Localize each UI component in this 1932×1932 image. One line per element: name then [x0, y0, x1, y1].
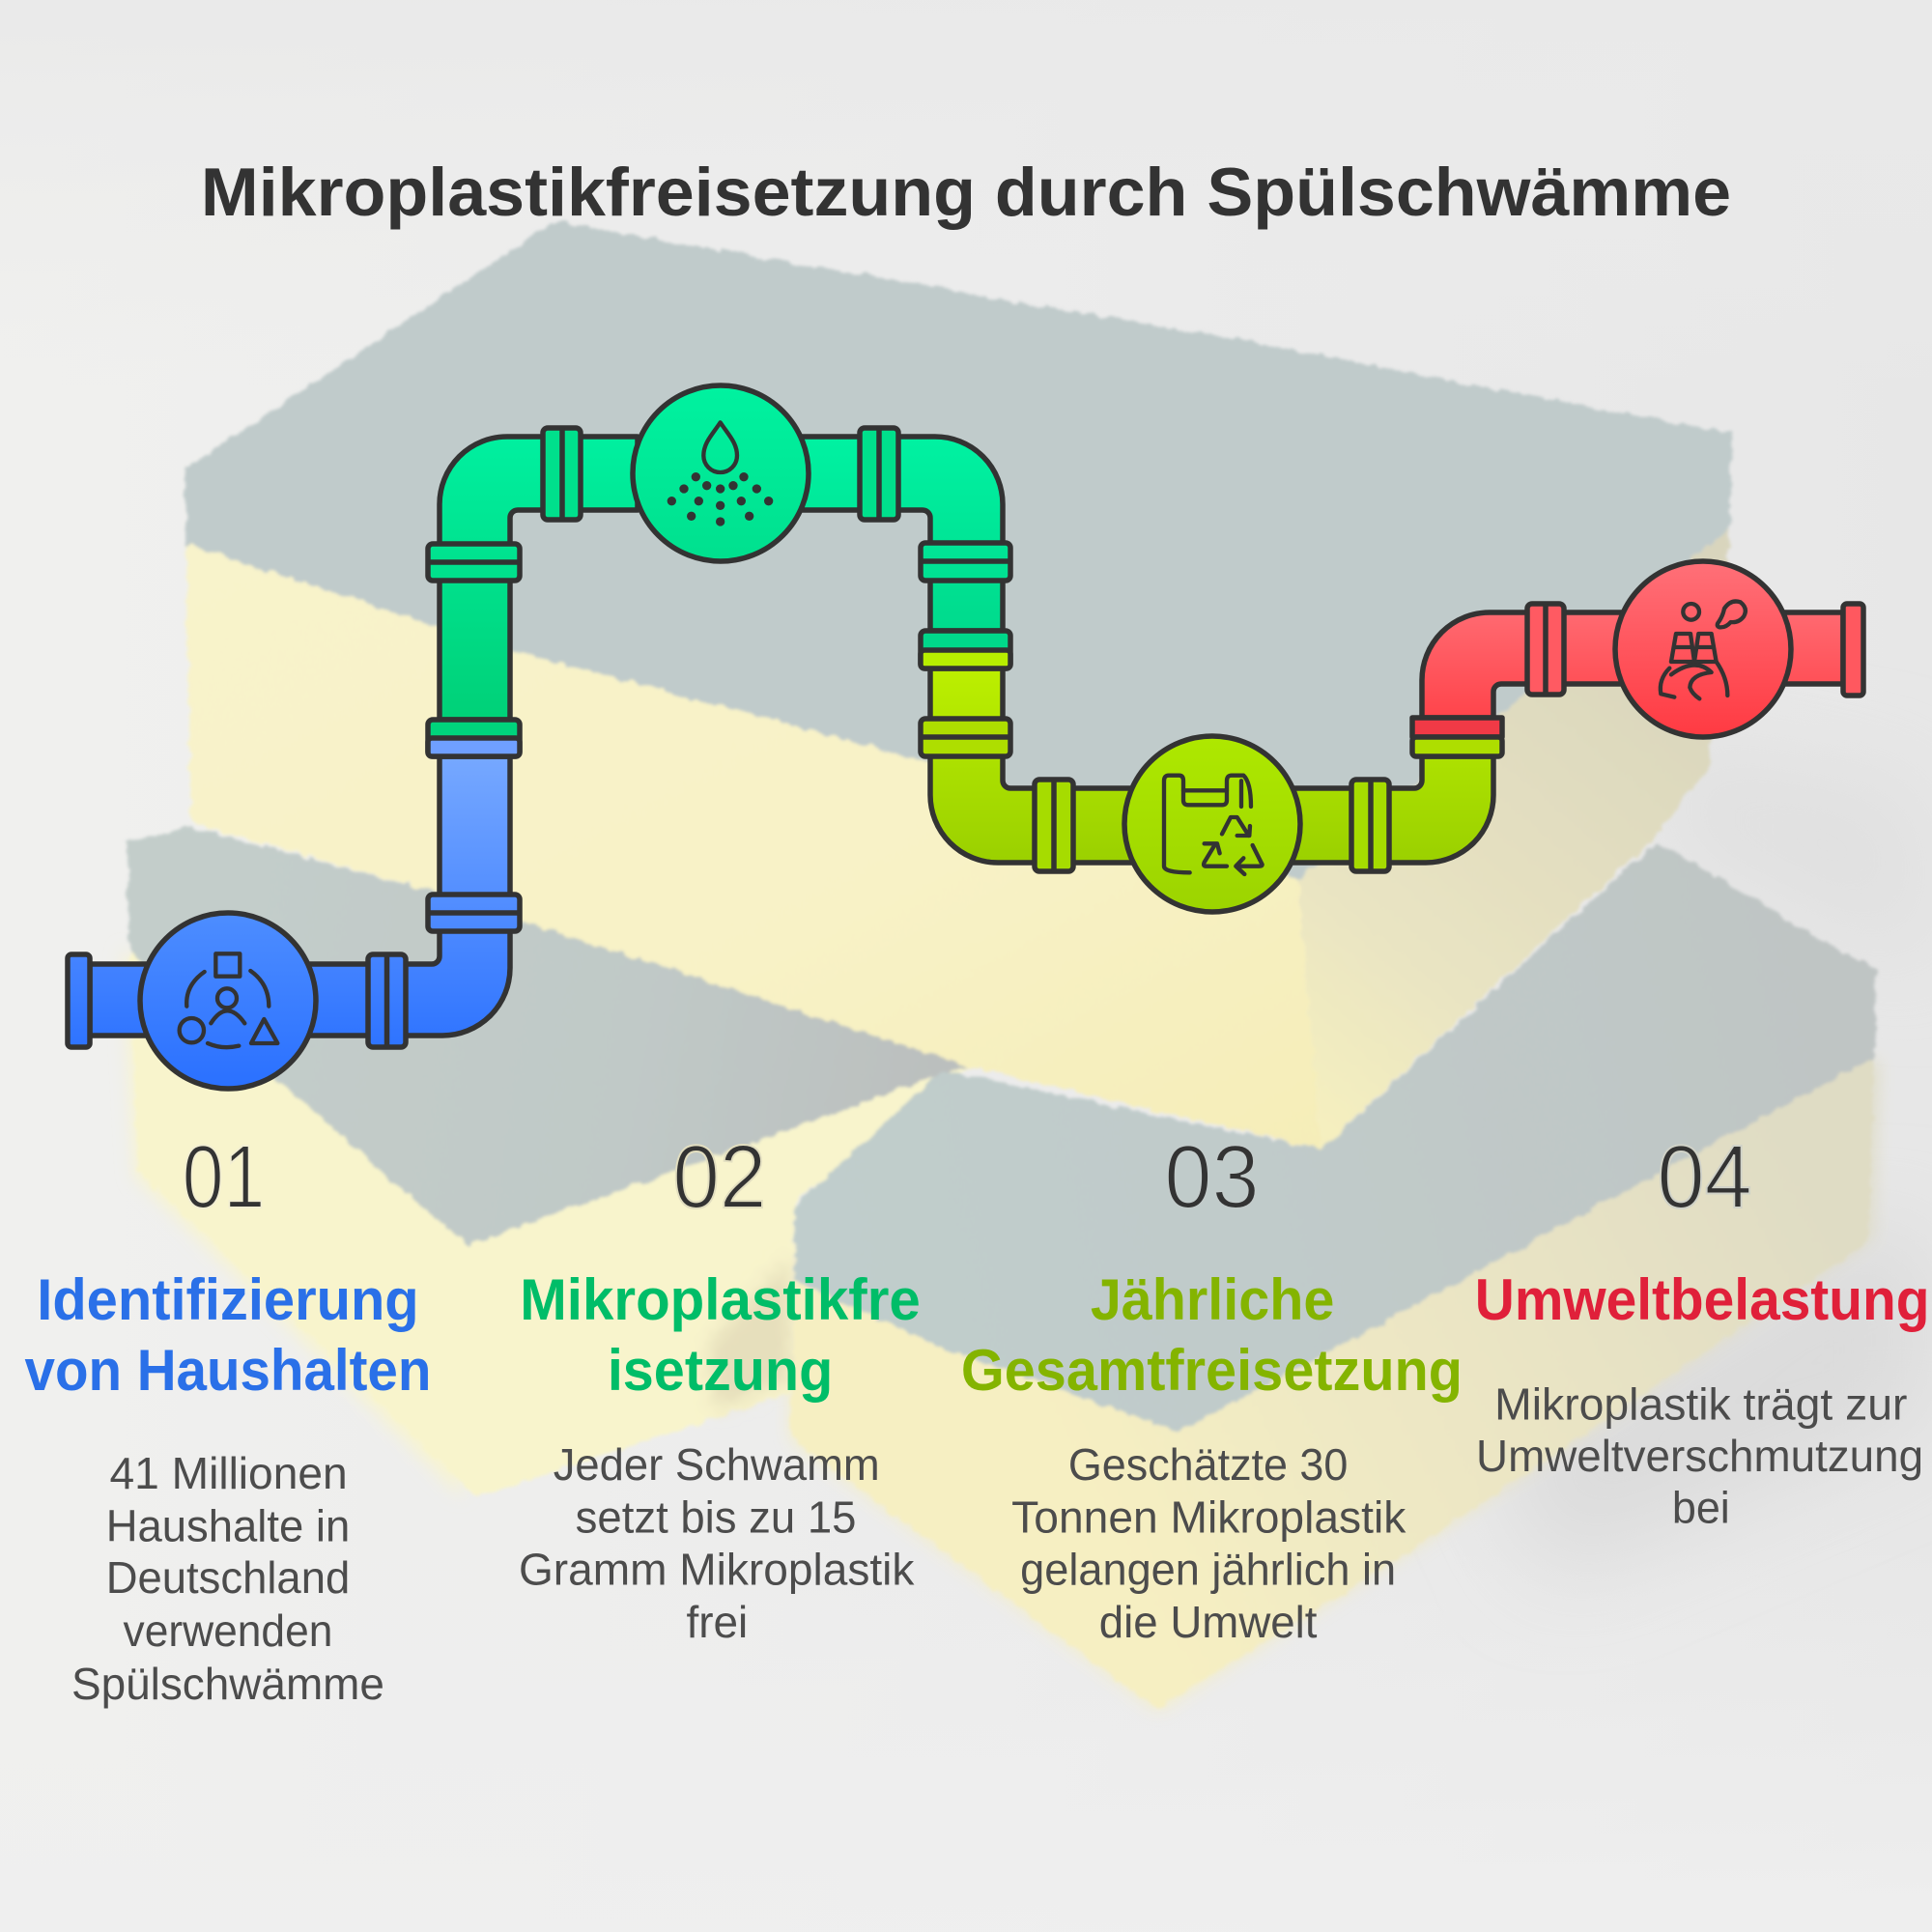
step 1 heading — [25, 1267, 431, 1403]
step 1 number: 01 — [183, 1126, 265, 1227]
step 1 description — [71, 1448, 384, 1709]
step 2 description: Gramm Mikroplastik — [519, 1544, 915, 1594]
icon: people and shapes — [180, 953, 277, 1047]
step 4 description: Umweltverschmutzung — [1476, 1431, 1923, 1481]
step 3 heading: Gesamtfreisetzung — [961, 1338, 1463, 1403]
step 4 description — [1476, 1378, 1923, 1533]
step 2 heading: Mikroplastikfre — [520, 1267, 921, 1332]
step 1 heading: Identifizierung — [37, 1267, 419, 1332]
left lower sponge — [127, 827, 972, 1497]
pipe segment: blue — [68, 756, 520, 1047]
step 2 heading — [520, 1267, 921, 1403]
node 4: red circle with pollution icon — [1615, 561, 1791, 737]
step 4 description: Mikroplastik trägt zur — [1494, 1378, 1907, 1429]
step 3: text block — [961, 1126, 1463, 1647]
step 3 description: die Umwelt — [1099, 1597, 1318, 1647]
pipeline — [68, 385, 1863, 1089]
step 3 description: gelangen jährlich in — [1020, 1544, 1396, 1594]
step 2 description — [519, 1439, 915, 1647]
step 2 number: 02 — [672, 1126, 766, 1227]
step 2 description: Jeder Schwamm — [554, 1439, 880, 1490]
step 1 heading: von Haushalten — [25, 1338, 431, 1403]
pipe segment: red — [1412, 604, 1863, 756]
step 3 heading: Jährliche — [1091, 1267, 1334, 1332]
step 4: text block — [1475, 1126, 1929, 1533]
node 3: lime circle with recycling bag icon — [1124, 736, 1300, 912]
step 3 description: Tonnen Mikroplastik — [1011, 1492, 1406, 1543]
node 1: blue circle with people and shapes icon — [140, 913, 316, 1089]
step 3 description: Geschätzte 30 — [1068, 1439, 1348, 1490]
step 3 heading — [961, 1267, 1463, 1403]
right lower sponge — [791, 841, 1877, 1709]
step 1 description: verwenden — [124, 1605, 332, 1656]
step 1 description: Haushalte in — [106, 1501, 350, 1551]
pipe segment: teal — [802, 428, 1010, 668]
icon: factory pollution — [1661, 601, 1746, 698]
step 1 description: 41 Millionen — [110, 1448, 348, 1498]
step 3 description — [1011, 1439, 1406, 1647]
step 2 description: setzt bis zu 15 — [576, 1492, 856, 1543]
node 2: green circle with droplet icon — [633, 385, 809, 561]
step 2 heading: isetzung — [608, 1338, 833, 1403]
step 4 description: bei — [1672, 1483, 1730, 1533]
step 3 number: 03 — [1164, 1126, 1260, 1227]
step 1 description: Spülschwämme — [71, 1659, 384, 1709]
step 2: text block — [519, 1126, 921, 1647]
icon: droplet and microparticles — [668, 422, 773, 526]
step 4 number: 04 — [1658, 1126, 1752, 1227]
pipe segment: green — [428, 428, 638, 756]
step 1 description: Deutschland — [106, 1552, 350, 1603]
pipe segment: lime — [921, 650, 1493, 871]
top sponge — [186, 222, 1731, 1150]
step 1: text block — [25, 1126, 431, 1709]
step 2 description: frei — [686, 1597, 748, 1647]
icon: plastic bag and recycling arrows — [1164, 776, 1263, 874]
title: Mikroplastikfreisetzung durch Spülschwämme — [201, 154, 1731, 230]
